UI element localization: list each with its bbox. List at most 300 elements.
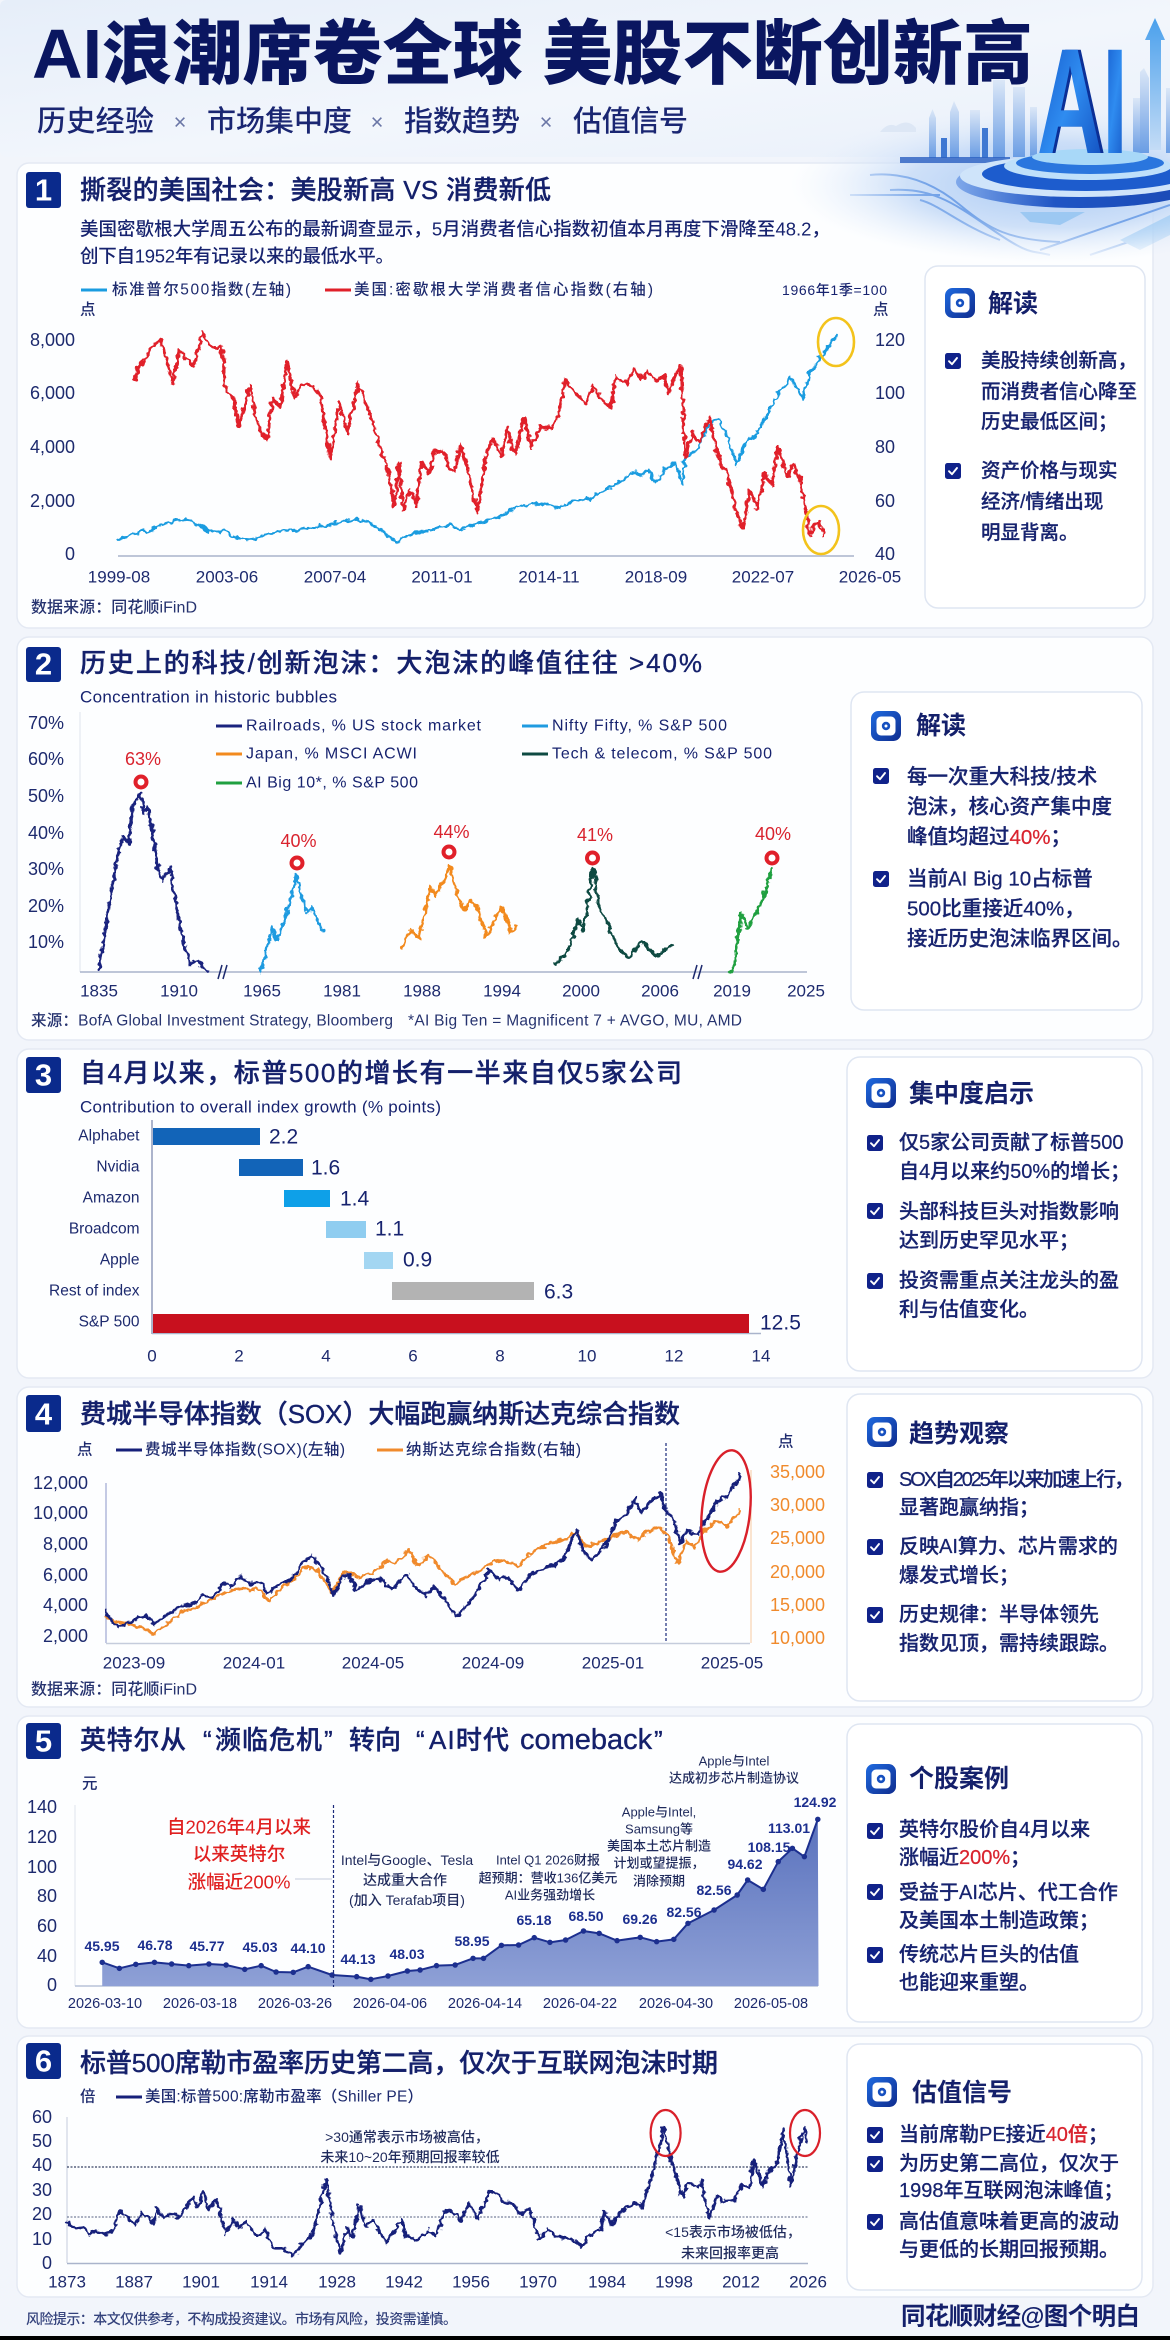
annotations: AI业务强劲增长 xyxy=(505,1888,595,1902)
bullets: 接近历史泡沫临界区间。 xyxy=(907,928,1132,950)
axes: 2024-01 xyxy=(223,1654,285,1672)
axes: 2026-03-26 xyxy=(258,1996,332,2012)
chart 1 axes: 2007-04 xyxy=(304,568,366,586)
bar values: 0.9 xyxy=(403,1248,432,1272)
chart 1 axes: 2026-05 xyxy=(839,568,901,586)
chart 1 axes: 8,000 xyxy=(30,330,75,350)
badge 4: 4 xyxy=(35,1396,53,1432)
bullets xyxy=(867,2123,1124,2261)
annotations xyxy=(341,1754,799,1908)
bullets: 涨幅近200%； xyxy=(899,1846,1030,1869)
bullets: 为历史第二高位，仅次于 xyxy=(899,2152,1119,2175)
axes xyxy=(33,1443,825,1672)
source 2: *AI Big Ten = Magnificent 7 + AVGO, MU, AMD xyxy=(408,1012,742,1030)
icon xyxy=(866,1078,896,1108)
chart 1 axes: 4,000 xyxy=(30,437,75,457)
y axis xyxy=(28,712,807,972)
badge 2 xyxy=(26,646,61,682)
side title: 趋势观察 xyxy=(909,1420,1009,1448)
x axis labels: 1988 xyxy=(403,982,441,1000)
bullets: 资产价格与现实 xyxy=(981,460,1118,482)
chart 1 axes: 100 xyxy=(875,383,905,403)
bullets: 每一次重大科技/技术 xyxy=(907,766,1097,788)
axes: 20,000 xyxy=(770,1562,825,1582)
bullets: SOX自2025年以来加速上行， xyxy=(899,1468,1134,1491)
axes: 2025-05 xyxy=(701,1654,763,1672)
side box 4 xyxy=(847,1394,1142,1701)
price labels: 45.95 xyxy=(84,1938,120,1954)
red callout xyxy=(167,1816,311,1892)
chart 2: bubbles xyxy=(28,712,825,1000)
x axis labels: 2006 xyxy=(641,982,679,1000)
chart 1 legend xyxy=(80,280,889,318)
heading 6: 标普500席勒市盈率历史第二高，仅次于互联网泡沫时期 xyxy=(80,2048,718,2078)
price labels: 65.18 xyxy=(516,1912,552,1928)
axes: 0 xyxy=(47,1975,57,1995)
axes xyxy=(32,2107,827,2292)
axes: 2024-09 xyxy=(462,1654,524,1672)
price labels: 69.26 xyxy=(622,1911,658,1927)
price labels: 58.95 xyxy=(454,1933,490,1949)
intro text: 美国密歇根大学周五公布的最新调查显示，5月消费者信心指数初值本月再度下滑降至48.2， xyxy=(80,218,830,240)
chart 5 xyxy=(27,1754,837,2012)
x axis labels: 1835 xyxy=(80,982,118,1000)
icon xyxy=(867,2077,897,2107)
bar labels: Apple xyxy=(100,1252,140,1268)
chart 3 subtitle: Contribution to overall index growth (% points) xyxy=(80,1098,441,1116)
bar values: 1.1 xyxy=(375,1218,404,1240)
axes: 60 xyxy=(37,1916,57,1936)
y axis: 30% xyxy=(28,859,64,879)
heading 5: 转向 xyxy=(349,1725,401,1755)
axes: 1998 xyxy=(655,2272,693,2292)
bullets: 历史最低区间； xyxy=(981,411,1118,433)
side box 3 xyxy=(847,1057,1142,1371)
heading 3: 自4月以来，标普500的增长有一半来自仅5家公司 xyxy=(80,1058,682,1088)
axes: 30,000 xyxy=(770,1495,825,1515)
annotations: Intel与Google、Tesla xyxy=(341,1852,473,1868)
side title: 集中度启示 xyxy=(909,1080,1034,1108)
highlight ellipse xyxy=(696,1448,756,1574)
peak labels: 40% xyxy=(280,831,317,851)
chart 1 legend: 美国:密歇根大学消费者信心指数(右轴) xyxy=(354,280,653,298)
badge 5: 5 xyxy=(35,1724,52,1758)
chart 1 axes: 60 xyxy=(875,491,895,511)
heading 5: “ xyxy=(203,1725,212,1755)
arrow xyxy=(1145,18,1165,150)
subtitle row: × xyxy=(174,110,186,134)
badge 6 xyxy=(26,2043,61,2079)
chart 1 axes: 2022-07 xyxy=(732,568,794,586)
bottom strip xyxy=(0,2336,1170,2340)
axes: 2026-04-14 xyxy=(448,1996,522,2012)
side title: 估值信号 xyxy=(912,2079,1012,2107)
axes: 2012 xyxy=(722,2272,760,2292)
axes: 30 xyxy=(32,2180,52,2200)
x axis: 12 xyxy=(665,1346,683,1366)
annotations: >30通常表示市场被高估， xyxy=(325,2129,489,2145)
x axis: 0 xyxy=(147,1346,157,1366)
side box 1 xyxy=(925,266,1145,608)
bullets: 泡沫，核心资产集中度 xyxy=(907,796,1112,818)
price labels: 45.77 xyxy=(189,1938,225,1954)
annotations: <15表示市场被低估， xyxy=(665,2224,801,2240)
heading 5: comeback xyxy=(520,1724,653,1756)
bullets: 达到历史罕见水平； xyxy=(899,1229,1079,1252)
annotations: 美国本土芯片制造 xyxy=(607,1838,711,1854)
bar values: 2.2 xyxy=(269,1126,298,1148)
legend xyxy=(216,718,772,792)
price labels: 46.78 xyxy=(137,1937,173,1953)
annotations: 超预期：营收136亿美元 xyxy=(479,1870,617,1886)
AI letters: A xyxy=(1037,17,1103,185)
bullets: 显著跑赢纳指； xyxy=(899,1496,1039,1519)
y axis: 70% xyxy=(28,713,64,733)
chart 1 axes: 1999-08 xyxy=(88,568,150,586)
panel 1: US society split xyxy=(17,163,1153,628)
axes: 2026-03-18 xyxy=(163,1996,237,2012)
axes: 2026-04-22 xyxy=(543,1996,617,2012)
chart 1 axes: 0 xyxy=(65,544,75,564)
bullets: 峰值均超过40%； xyxy=(907,826,1071,848)
legend: Railroads, % US stock market xyxy=(246,718,482,734)
axes: 12,000 xyxy=(33,1473,88,1493)
axes: 120 xyxy=(27,1827,57,1847)
bar labels: Broadcom xyxy=(69,1220,140,1238)
bullets: 而消费者信心降至 xyxy=(981,381,1137,403)
heading 5: 英特尔从 xyxy=(80,1725,186,1755)
AI letters: A xyxy=(1040,17,1106,185)
chart 1 legend: 点 xyxy=(873,300,889,318)
peak labels: 63% xyxy=(125,749,161,769)
axes: 1914 xyxy=(250,2272,288,2292)
bullets: 英特尔股价自4月以来 xyxy=(899,1818,1090,1841)
legend: 倍 xyxy=(80,2086,96,2106)
bullets: 高估值意味着更高的波动 xyxy=(899,2210,1119,2233)
axes: 2026 xyxy=(789,2272,827,2292)
y axis: 20% xyxy=(28,896,64,916)
x axis: 4 xyxy=(321,1346,331,1366)
heading 5: ” xyxy=(324,1725,333,1755)
bullets: 1998年互联网泡沫峰值； xyxy=(899,2179,1124,2202)
side title: 个股案例 xyxy=(909,1765,1009,1793)
badge 1: 1 xyxy=(35,172,52,208)
axes: 2026-04-06 xyxy=(353,1996,427,2012)
peak labels: 40% xyxy=(755,824,791,844)
axes: 2026-05-08 xyxy=(734,1996,808,2012)
subtitle row: 指数趋势 xyxy=(404,105,520,138)
axes: 1887 xyxy=(115,2272,153,2292)
chart 1 axes: 2018-09 xyxy=(625,568,687,586)
bullets: 美股持续创新高， xyxy=(981,350,1137,372)
main title: AI浪潮席卷全球 美股不断创新高 xyxy=(32,15,1033,93)
price labels: 44.13 xyxy=(340,1951,376,1967)
x axis xyxy=(147,1346,770,1366)
floor wash xyxy=(824,123,1170,256)
axes: 35,000 xyxy=(770,1462,825,1482)
lines xyxy=(106,1475,740,1634)
legend xyxy=(77,1432,794,1458)
bullets: 传统芯片巨头的估值 xyxy=(899,1943,1079,1966)
axes: 1956 xyxy=(452,2272,490,2292)
chart 1 axes: 2014-11 xyxy=(518,568,580,586)
intro text xyxy=(80,218,830,266)
axes: 1970 xyxy=(519,2272,557,2292)
y axis: 10% xyxy=(28,932,64,952)
bar labels: Alphabet xyxy=(78,1128,140,1144)
subtitle row xyxy=(37,105,688,138)
chart 2 subtitle: Concentration in historic bubbles xyxy=(80,688,337,706)
chart 1 axes xyxy=(30,330,905,586)
axes: 80 xyxy=(37,1886,57,1906)
heading 5: 濒临危机 xyxy=(215,1725,322,1755)
heading 5: ” xyxy=(654,1725,663,1755)
x axis: 10 xyxy=(578,1346,596,1366)
bullets: 当前AI Big 10占标普 xyxy=(907,868,1093,890)
annotations: 未来回报率更高 xyxy=(681,2245,779,2261)
data source 1: 数据来源：同花顺iFinD xyxy=(31,598,197,616)
bullets: 头部科技巨头对指数影响 xyxy=(899,1200,1119,1223)
red callout: 以来英特尔 xyxy=(193,1844,285,1864)
peak markers xyxy=(136,776,778,868)
annotations: Samsung等 xyxy=(625,1822,693,1836)
bullets: 明显背离。 xyxy=(981,522,1079,544)
badge 1 xyxy=(26,172,61,208)
subtitle row: 历史经验 xyxy=(37,105,154,138)
chart 1 axes: 2011-01 xyxy=(411,568,473,586)
x axis labels: 2025 xyxy=(787,982,825,1000)
axes: 2025-01 xyxy=(582,1654,644,1672)
axes: 4,000 xyxy=(43,1595,88,1615)
source 4: 数据来源：同花顺iFinD xyxy=(31,1680,197,1698)
bubble lines xyxy=(98,793,772,971)
source 2 xyxy=(31,1012,742,1030)
bullets: 受益于AI芯片、代工合作 xyxy=(899,1881,1118,1904)
axes: 1901 xyxy=(182,2272,220,2292)
chart 1 axes: 6,000 xyxy=(30,383,75,403)
hero illustration xyxy=(824,18,1170,256)
badge 2: 2 xyxy=(35,646,52,682)
badge 3 xyxy=(26,1057,61,1093)
chart 1 legend: 1966年1季=100 xyxy=(782,282,887,298)
panel 3: top-5 contribution xyxy=(17,1049,1153,1378)
bar labels xyxy=(49,1128,140,1330)
bullets: 与更低的长期回报预期。 xyxy=(899,2238,1119,2261)
axes: 25,000 xyxy=(770,1528,825,1548)
risk disclaimer: 风险提示：本文仅供参考，不构成投资建议。市场有风险，投资需谨慎。 xyxy=(26,2311,457,2327)
axes: 1873 xyxy=(48,2272,86,2292)
y axis: 50% xyxy=(28,786,64,806)
annotations: 达成初步芯片制造协议 xyxy=(669,1770,799,1786)
peak labels xyxy=(125,749,791,851)
bar values xyxy=(269,1126,801,1334)
chart 1 legend: 点 xyxy=(80,300,96,318)
bullets: 及美国本土制造政策； xyxy=(899,1909,1099,1932)
bullets: 爆发式增长； xyxy=(899,1564,1019,1587)
heading 2: 历史上的科技/创新泡沫：大泡沫的峰值往往 >40% xyxy=(80,648,702,678)
PE line xyxy=(67,2127,807,2256)
x axis: 8 xyxy=(495,1346,505,1366)
annotations: 未来10~20年预期回报率较低 xyxy=(320,2149,500,2165)
heading 5: “ xyxy=(416,1725,425,1755)
panel 2: historic bubbles xyxy=(17,637,1153,1040)
legend: 纳斯达克综合指数(右轴) xyxy=(406,1440,581,1458)
x axis: 14 xyxy=(752,1346,770,1366)
peak labels: 41% xyxy=(577,825,613,845)
chart 1 axes: 2003-06 xyxy=(196,568,258,586)
legend: AI Big 10*, % S&P 500 xyxy=(246,774,418,792)
bullets: 也能迎来重塑。 xyxy=(899,1971,1039,1994)
axes: 元 xyxy=(82,1776,98,1792)
chart 1 legend: 标准普尔500指数(左轴) xyxy=(112,280,291,298)
axes: 20 xyxy=(32,2204,52,2224)
peak circles xyxy=(651,2110,820,2156)
axes: 2026-04-30 xyxy=(639,1996,713,2012)
price labels: 94.62 xyxy=(727,1856,763,1872)
bullets xyxy=(867,1468,1134,1655)
x axis labels: 1994 xyxy=(483,982,521,1000)
price labels: 124.92 xyxy=(794,1794,837,1810)
price labels: 48.03 xyxy=(389,1946,425,1962)
bullets: 利与估值变化。 xyxy=(899,1298,1039,1321)
axes: 140 xyxy=(27,1797,57,1817)
bullets xyxy=(867,1818,1118,1994)
bullets xyxy=(945,350,1137,544)
side box 6 xyxy=(847,2044,1142,2290)
bars xyxy=(153,1128,749,1333)
legend: 费城半导体指数(SOX)(左轴) xyxy=(145,1440,345,1458)
highlight circles xyxy=(803,318,854,554)
axes: 2,000 xyxy=(43,1626,88,1646)
annotations: 达成重大合作 xyxy=(363,1872,447,1888)
price labels: 82.56 xyxy=(666,1904,702,1920)
side box 2 xyxy=(851,692,1142,1010)
x axis labels xyxy=(80,965,825,1000)
header background xyxy=(0,0,1170,157)
price labels: 45.03 xyxy=(242,1939,278,1955)
axes: 2024-05 xyxy=(342,1654,404,1672)
legend: Tech & telecom, % S&P 500 xyxy=(552,746,772,762)
price labels: 113.01 xyxy=(768,1820,810,1836)
signature: 同花顺财经@图个明白 xyxy=(901,2302,1140,2330)
bullets: 历史规律：半导体领先 xyxy=(899,1603,1099,1626)
panel 6: Shiller PE xyxy=(17,2036,1153,2297)
bullets: 指数见顶，需持续跟踪。 xyxy=(899,1632,1119,1655)
icon xyxy=(867,1417,897,1447)
red callout: 涨幅近200% xyxy=(188,1872,290,1892)
icon xyxy=(945,288,975,318)
subtitle row: × xyxy=(540,110,552,134)
icon xyxy=(871,711,901,741)
chart 1: S&P 500 vs consumer sentiment xyxy=(30,280,905,586)
bullets: 投资需重点关注龙头的盈 xyxy=(899,1269,1119,1292)
chart 1 axes: 2,000 xyxy=(30,491,75,511)
x axis labels: 1910 xyxy=(160,982,198,1000)
bar labels: Amazon xyxy=(83,1190,140,1206)
bullets: 反映AI算力、芯片需求的 xyxy=(899,1535,1118,1558)
bullets xyxy=(867,1131,1130,1321)
annotations xyxy=(320,2129,801,2261)
axes: 40 xyxy=(37,1946,57,1966)
source 2: 来源：BofA Global Investment Strategy, Bloomberg xyxy=(31,1012,393,1030)
annotations: Intel Q1 2026财报 xyxy=(496,1852,600,1868)
legend: Nifty Fifty, % S&P 500 xyxy=(552,718,727,734)
intro text: 创下自1952年有记录以来的最低水平。 xyxy=(80,246,394,266)
bullets xyxy=(873,766,1132,950)
axes: 10,000 xyxy=(33,1503,88,1523)
chart 1 lines xyxy=(118,333,837,542)
axes: 10 xyxy=(32,2229,52,2249)
price labels xyxy=(84,1794,837,1967)
peak labels: 44% xyxy=(433,822,470,842)
axes: 40 xyxy=(32,2155,52,2175)
AI letters: I xyxy=(1102,17,1128,185)
icon xyxy=(866,1764,896,1794)
bullets: 仅5家公司贡献了标普500 xyxy=(899,1131,1124,1154)
price labels: 82.56 xyxy=(696,1882,732,1898)
annotations: 消除预期 xyxy=(633,1874,685,1888)
y axis: 40% xyxy=(28,823,64,843)
bar values: 6.3 xyxy=(544,1280,573,1304)
subtitle row: 估值信号 xyxy=(573,105,688,138)
bullets: 500比重接近40%， xyxy=(907,898,1085,920)
y axis: 60% xyxy=(28,749,64,769)
heading 1: 撕裂的美国社会：美股新高 VS 消费新低 xyxy=(80,175,551,205)
x axis: 6 xyxy=(408,1346,418,1366)
axes: 2026-03-10 xyxy=(68,1996,142,2012)
axes: 8,000 xyxy=(43,1534,88,1554)
platform xyxy=(900,149,1170,208)
bar labels: Rest of index xyxy=(49,1282,140,1300)
axes: 0 xyxy=(42,2253,52,2273)
chart 1 axes: 40 xyxy=(875,544,895,564)
red callout: 自2026年4月以来 xyxy=(167,1816,311,1838)
badge 3: 3 xyxy=(35,1058,52,1092)
chart 4 xyxy=(33,1432,825,1672)
axes xyxy=(27,1776,818,2012)
side title: 解读 xyxy=(988,290,1038,318)
axes: 2023-09 xyxy=(103,1654,165,1672)
subtitle row: 市场集中度 xyxy=(207,105,352,138)
axes: 6,000 xyxy=(43,1565,88,1585)
annotations: (加入 Terafab项目) xyxy=(349,1892,465,1908)
x axis labels: 1981 xyxy=(323,982,361,1000)
heading 5: AI时代 xyxy=(429,1725,509,1755)
panel 5: Intel xyxy=(17,1716,1153,2028)
annotations: Apple与Intel, xyxy=(622,1804,696,1820)
badge 4 xyxy=(26,1395,61,1432)
badge 5 xyxy=(26,1723,61,1759)
bar values: 1.4 xyxy=(340,1188,370,1210)
legend: Japan, % MSCI ACWI xyxy=(246,746,417,762)
axes: 50 xyxy=(32,2131,52,2151)
x axis: 2 xyxy=(234,1346,244,1366)
bar labels: Nvidia xyxy=(96,1158,140,1176)
chart 1 axes: 120 xyxy=(875,330,905,350)
axes: 100 xyxy=(27,1857,57,1877)
side box 5 xyxy=(847,1724,1142,2022)
price labels: 68.50 xyxy=(568,1908,604,1924)
x axis labels: 2019 xyxy=(713,982,751,1000)
axes: 10,000 xyxy=(770,1628,825,1648)
legend: 点 xyxy=(778,1432,794,1450)
legend: 点 xyxy=(77,1440,93,1458)
axes: 1928 xyxy=(318,2272,356,2292)
bar values: 1.6 xyxy=(311,1156,340,1180)
area chart xyxy=(102,1819,819,1986)
x axis labels: 1965 xyxy=(243,982,281,1000)
price labels: 44.10 xyxy=(290,1940,326,1956)
